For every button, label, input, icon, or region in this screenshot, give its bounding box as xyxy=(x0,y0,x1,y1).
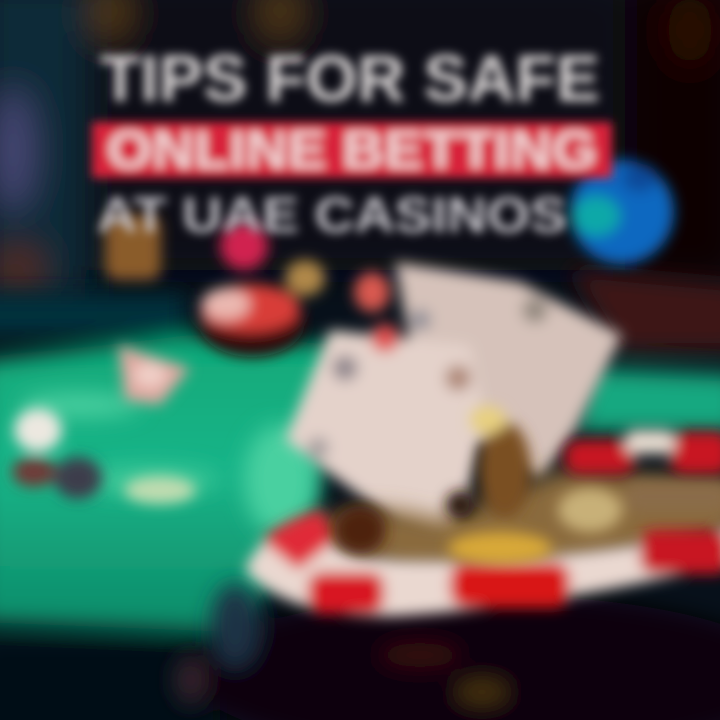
table highlights xyxy=(20,393,316,535)
title banner xyxy=(92,41,612,243)
title line 3: AT UAE CASINOS xyxy=(97,187,567,243)
red and white chip ring xyxy=(245,430,720,616)
green table felt xyxy=(0,270,720,720)
chip bowl interior xyxy=(300,470,720,572)
gold chips and coins xyxy=(334,406,720,564)
globe icon xyxy=(570,160,674,264)
bottom dark foreground xyxy=(174,583,720,720)
title line 2: ONLINE BETTING xyxy=(107,120,597,180)
left chips and small card xyxy=(12,345,196,504)
red highlight band xyxy=(92,122,612,178)
background: upper dark wall xyxy=(0,0,720,300)
central chip stack and glass xyxy=(105,215,325,357)
title line 1: TIPS FOR SAFE xyxy=(100,41,600,115)
playing cards xyxy=(285,262,622,545)
